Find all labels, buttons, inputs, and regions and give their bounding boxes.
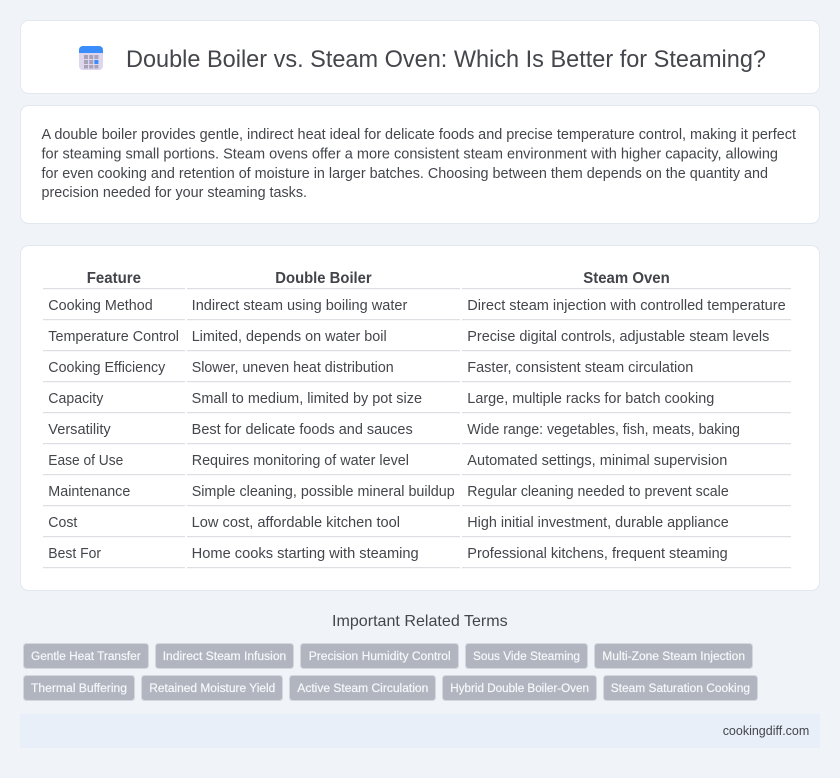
row: maintenance xyxy=(43,484,791,506)
chip: indirect steam infusion xyxy=(156,644,294,668)
panel: comparison table xyxy=(20,246,820,590)
row: ease of use: Requires monitoring of water level xyxy=(192,453,409,469)
table header xyxy=(43,270,791,289)
row: cooking efficiency xyxy=(43,360,791,382)
chip: precision humidity control: Precision Humidity Control xyxy=(309,649,451,663)
title text: Double Boiler vs. Steam Oven: Which Is Better for Steaming? xyxy=(126,46,766,73)
chip: gentle heat transfer xyxy=(24,644,148,668)
row: cooking efficiency: Slower, uneven heat distribution xyxy=(192,360,394,376)
icon: calendar xyxy=(79,46,103,70)
chip: thermal buffering xyxy=(24,676,134,700)
related term chips xyxy=(24,644,758,700)
chip: thermal buffering: Thermal Buffering xyxy=(31,681,127,695)
row: versatility xyxy=(43,422,791,444)
footer bar xyxy=(20,714,820,748)
chip: indirect steam infusion: Indirect Steam Infusion xyxy=(163,649,286,663)
chip: gentle heat transfer: Gentle Heat Transfer xyxy=(31,649,141,663)
chip: hybrid double boiler-oven: Hybrid Double Boiler-Oven xyxy=(450,681,589,695)
row: capacity: Capacity xyxy=(48,391,104,407)
chip: retained moisture yield xyxy=(142,676,282,700)
row: versatility: Versatility xyxy=(48,422,112,438)
panel: introduction xyxy=(20,106,820,224)
intro paragraph: for even cooking and retention of moisture in larger batches. Choosing between them depends on the quantity and xyxy=(42,166,768,182)
intro paragraph: precision needed for your steaming tasks. xyxy=(42,185,307,201)
row: maintenance: Simple cleaning, possible mineral buildup xyxy=(192,484,455,500)
row: versatility: Best for delicate foods and sauces xyxy=(192,422,413,438)
chip: multi-zone steam injection: Multi-Zone Steam Injection xyxy=(602,649,745,663)
row: cooking efficiency: Cooking Efficiency xyxy=(48,360,166,376)
row: capacity xyxy=(43,391,791,413)
chip: active steam circulation: Active Steam Circulation xyxy=(297,681,428,695)
row: ease of use xyxy=(43,453,791,475)
intro paragraph: A double boiler provides gentle, indirect heat ideal for delicate foods and precise temperature control, making it perfect xyxy=(42,127,796,143)
row: best for: Best For xyxy=(48,546,101,562)
row: best for xyxy=(43,546,791,568)
row: capacity: Large, multiple racks for batch cooking xyxy=(467,391,714,407)
intro paragraph: for steaming small portions. Steam ovens offer a more consistent steam environment with higher capacity, allowing xyxy=(42,146,778,162)
row: cost: Low cost, affordable kitchen tool xyxy=(192,515,400,531)
chip: hybrid double boiler-oven xyxy=(442,676,596,700)
chip: sous vide steaming xyxy=(466,644,588,668)
panel: title xyxy=(20,20,820,94)
row: cooking method xyxy=(43,298,791,320)
row: maintenance: Regular cleaning needed to prevent scale xyxy=(467,484,729,500)
row: cooking method: Direct steam injection with controlled temperature xyxy=(467,298,786,314)
row: best for: Professional kitchens, frequent steaming xyxy=(467,546,728,562)
row: maintenance: Maintenance xyxy=(48,484,130,500)
chip: precision humidity control xyxy=(300,644,458,668)
row: temperature control: Temperature Control xyxy=(48,329,179,345)
chip: multi-zone steam injection xyxy=(594,644,752,668)
row: versatility: Wide range: vegetables, fish, meats, baking xyxy=(467,422,740,438)
chip: sous vide steaming: Sous Vide Steaming xyxy=(473,649,580,663)
row: cost: High initial investment, durable appliance xyxy=(467,515,729,531)
chip: retained moisture yield: Retained Moisture Yield xyxy=(149,681,275,695)
row: capacity: Small to medium, limited by pot size xyxy=(192,391,422,407)
heading: important related terms: Important Related Terms xyxy=(332,613,508,630)
row: temperature control: Precise digital controls, adjustable steam levels xyxy=(467,329,769,345)
row: cost: Cost xyxy=(48,515,77,531)
footer site name: cookingdiff.com xyxy=(723,723,809,738)
chip: steam saturation cooking: Steam Saturation Cooking xyxy=(611,681,750,695)
row: best for: Home cooks starting with steaming xyxy=(192,546,419,562)
chip: steam saturation cooking xyxy=(604,676,758,700)
table header: Double Boiler xyxy=(275,270,372,287)
table header: Feature xyxy=(87,270,141,287)
row: cooking method: Cooking Method xyxy=(48,298,153,314)
intro paragraph xyxy=(42,127,796,201)
row: ease of use: Ease of Use xyxy=(48,453,123,469)
row: cooking efficiency: Faster, consistent steam circulation xyxy=(467,360,693,376)
row: ease of use: Automated settings, minimal supervision xyxy=(467,453,727,469)
row: temperature control xyxy=(43,329,791,351)
row: cost xyxy=(43,515,791,537)
row: cooking method: Indirect steam using boiling water xyxy=(192,298,408,314)
table header: Steam Oven xyxy=(583,270,670,287)
row: temperature control: Limited, depends on water boil xyxy=(192,329,387,345)
chip: active steam circulation xyxy=(290,676,436,700)
